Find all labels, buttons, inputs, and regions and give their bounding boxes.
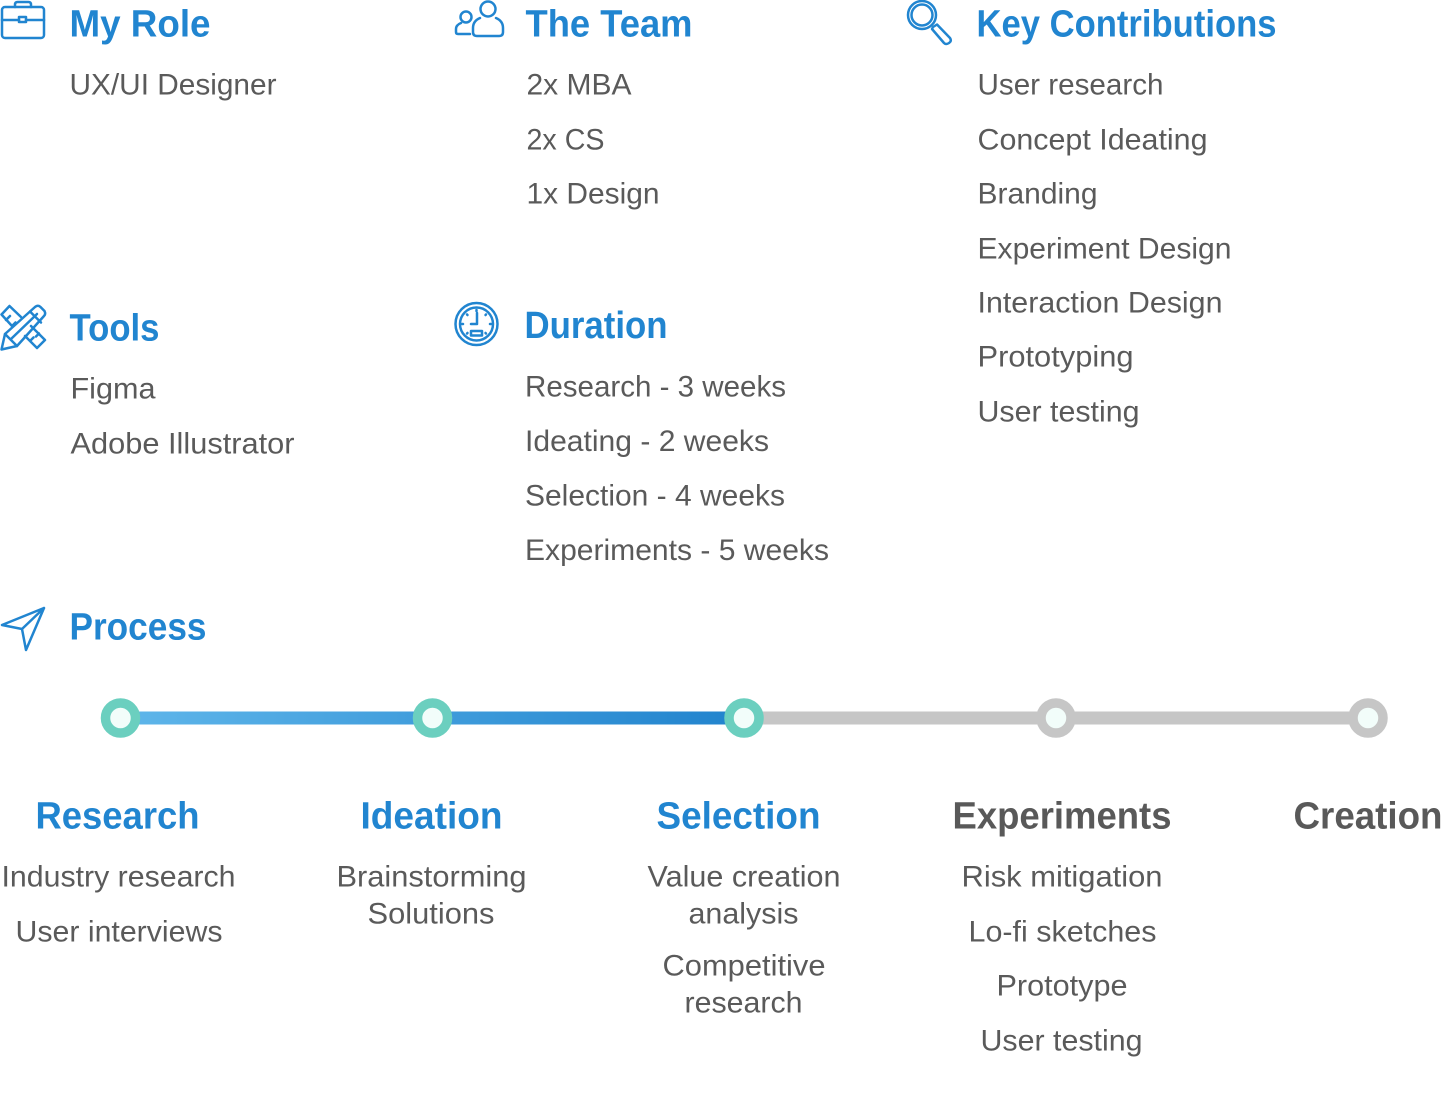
panel: the team — [456, 2, 692, 210]
heading: My Role — [70, 3, 210, 45]
stage: ideation — [336, 795, 526, 930]
icon: paper plane — [2, 608, 44, 650]
stage: experiments — [952, 795, 1172, 1057]
heading: Tools — [70, 307, 160, 349]
stage: selection: Value creation — [648, 860, 840, 893]
list — [978, 68, 1232, 428]
icon: people — [456, 2, 503, 36]
panel: tools — [2, 306, 295, 460]
stage: research: Industry research — [2, 860, 236, 893]
list: 1x Design — [526, 177, 660, 210]
stage: creation: Creation — [1294, 795, 1442, 837]
list: Concept Ideating — [978, 123, 1208, 156]
icon: magnifier — [908, 1, 951, 44]
list: User research — [978, 68, 1164, 101]
list: Experiment Design — [978, 232, 1232, 265]
list: Selection - 4 weeks — [525, 479, 785, 512]
list: Branding — [978, 177, 1098, 210]
timeline — [106, 703, 1383, 733]
stage: selection: research — [684, 986, 802, 1019]
list — [525, 370, 829, 567]
stage: experiments: Lo-fi sketches — [968, 915, 1156, 948]
heading: Key Contributions — [976, 3, 1276, 45]
stage: selection — [648, 795, 840, 1019]
heading: Process — [70, 606, 206, 648]
stage: research: Research — [36, 795, 200, 837]
icon: briefcase — [2, 2, 44, 38]
list: Experiments - 5 weeks — [525, 534, 829, 567]
stage: experiments: Experiments — [952, 795, 1172, 837]
list: Interaction Design — [978, 286, 1222, 319]
stage: research — [2, 795, 236, 948]
list: Ideating - 2 weeks — [525, 425, 769, 458]
panel: key contributions — [908, 1, 1276, 428]
stage: experiments: Risk mitigation — [962, 860, 1162, 893]
list: Figma — [70, 372, 156, 405]
stage: selection: analysis — [688, 897, 798, 930]
stage: selection: Selection — [656, 795, 820, 837]
stage: ideation: Brainstorming — [336, 860, 526, 893]
icon: ruler and pencil — [2, 306, 45, 350]
list: User testing — [978, 395, 1140, 428]
list: Prototyping — [978, 340, 1134, 373]
list: 2x CS — [526, 123, 604, 156]
list: Adobe Illustrator — [70, 427, 295, 460]
panel: duration — [456, 303, 829, 567]
stage: research: User interviews — [16, 915, 222, 948]
panel: process — [2, 606, 1442, 1057]
heading: The Team — [526, 3, 692, 45]
list: 2x MBA — [526, 68, 632, 101]
icon: clock — [456, 303, 498, 345]
panel: my role — [2, 2, 277, 101]
list: Research - 3 weeks — [525, 370, 786, 403]
list — [70, 372, 295, 460]
stage: ideation: Ideation — [360, 795, 502, 837]
heading: Duration — [524, 305, 668, 347]
stage: experiments: Prototype — [996, 969, 1128, 1002]
text: UX/UI Designer — [70, 68, 277, 101]
stage: selection: Competitive — [662, 949, 826, 982]
stage: ideation: Solutions — [368, 897, 494, 930]
stage: experiments: User testing — [980, 1024, 1142, 1057]
list — [526, 68, 660, 210]
